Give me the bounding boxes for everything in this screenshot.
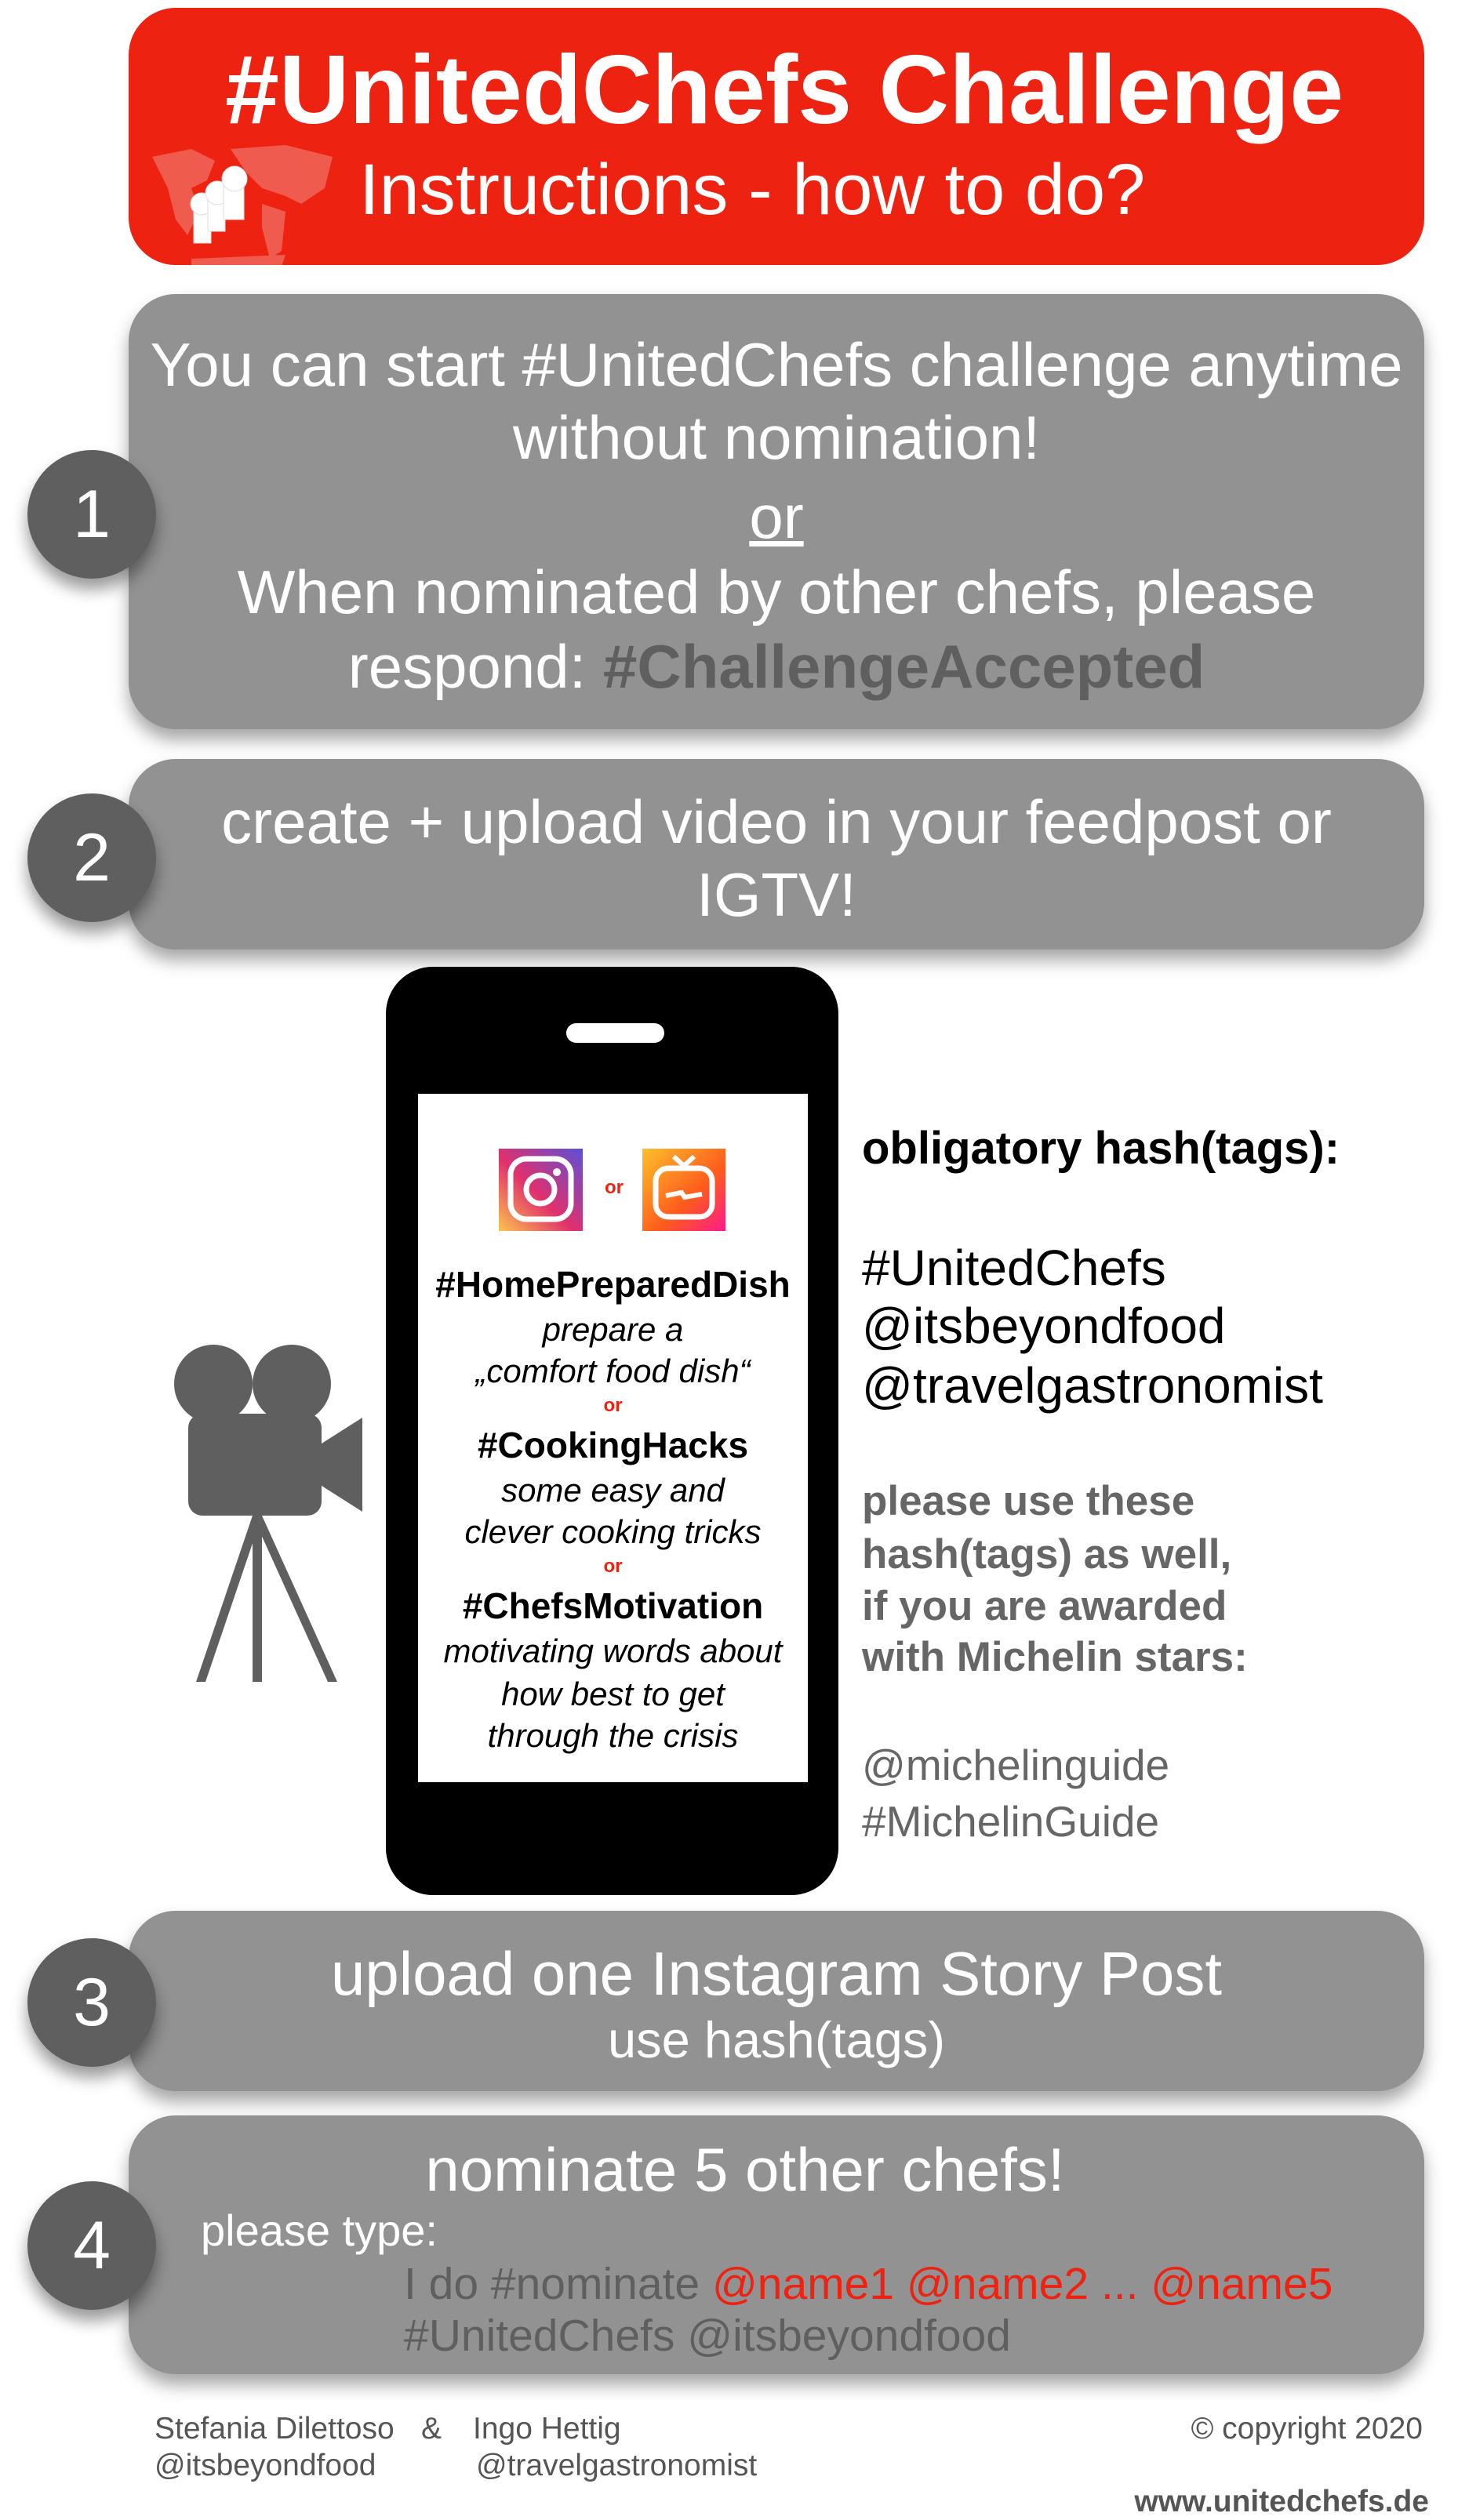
- hashtag options: how best to get: [501, 1676, 725, 1712]
- panel: step 1: You can start #UnitedChefs challenge anytime: [150, 330, 1403, 399]
- text: with Michelin stars:: [862, 1634, 1248, 1680]
- footer: copyright: © copyright 2020: [1191, 2412, 1423, 2446]
- title: #UnitedChefs Challenge: [225, 36, 1343, 144]
- panel: step 2: create + upload video in your feedpost or: [221, 787, 1332, 856]
- step number 3: 3: [73, 1965, 111, 2040]
- step number 4: [27, 2181, 156, 2310]
- icon: video camera: [174, 1345, 362, 1682]
- text: obligatory hash(tags):: [862, 1123, 1340, 1174]
- text: #UnitedChefs: [862, 1240, 1166, 1296]
- text: @travelgastronomist: [862, 1357, 1323, 1414]
- hashtag options: motivating words about: [444, 1632, 782, 1669]
- hashtag options: #CookingHacks: [478, 1425, 748, 1465]
- footer: credits: @travelgastronomist: [476, 2449, 757, 2482]
- panel: step 2: [129, 759, 1424, 950]
- footer: credits: Ingo Hettig: [473, 2412, 621, 2446]
- panel: step 4: #UnitedChefs @itsbeyondfood: [404, 2311, 1011, 2361]
- footer: credits: @itsbeyondfood: [155, 2449, 376, 2482]
- or: or: [605, 1177, 624, 1198]
- footer: credits: Stefania Dilettoso: [155, 2412, 394, 2446]
- step number 3: [27, 1938, 156, 2067]
- text: @itsbeyondfood: [862, 1298, 1225, 1354]
- hashtag options: some easy and: [501, 1472, 725, 1509]
- panel: step 1: or: [749, 482, 804, 551]
- panel: step 3: use hash(tags): [608, 2011, 945, 2068]
- panel: step 3: upload one Instagram Story Post: [331, 1939, 1222, 2008]
- step number 2: 2: [73, 820, 111, 895]
- hashtag options: clever cooking tricks: [464, 1513, 762, 1550]
- hashtag options: [435, 1264, 791, 1754]
- hashtag options: #HomePreparedDish: [435, 1264, 791, 1305]
- panel: step 4: I do #nominate @name1 @name2 ... @name5: [404, 2259, 1333, 2309]
- header banner: [129, 8, 1424, 265]
- step number 4: 4: [73, 2208, 111, 2283]
- icon: IGTV: [642, 1149, 725, 1231]
- hashtag options: prepare a: [543, 1311, 683, 1348]
- panel: step 4: nominate 5 other chefs!: [425, 2135, 1065, 2204]
- footer: credits: &: [421, 2412, 442, 2446]
- text: #MichelinGuide: [862, 1797, 1159, 1846]
- subtitle: Instructions - how to do?: [359, 150, 1145, 230]
- panel: step 1: When nominated by other chefs, please: [238, 557, 1315, 626]
- text: @michelinguide: [862, 1741, 1169, 1789]
- panel: step 4: please type:: [201, 2206, 438, 2255]
- hashtag options: or: [604, 1395, 623, 1416]
- footer: credits: [155, 2412, 757, 2482]
- icon: chef hats: [190, 166, 248, 243]
- step number 1: [27, 450, 156, 579]
- world map decoration: [152, 145, 333, 265]
- step number 1: 1: [73, 477, 111, 552]
- panel: step 2: IGTV!: [696, 860, 856, 929]
- text: hash(tags) as well,: [862, 1531, 1231, 1578]
- panel: step 1: respond: #ChallengeAccepted: [348, 632, 1205, 701]
- hashtag options: or: [604, 1556, 623, 1577]
- hashtag options: #ChefsMotivation: [463, 1585, 763, 1626]
- icon: instagram: [499, 1149, 583, 1231]
- footer: website: www.unitedchefs.de: [1134, 2485, 1429, 2518]
- text block: michelin hashtags: [861, 1478, 1248, 1846]
- panel: step 1: without nomination!: [513, 403, 1040, 472]
- text: if you are awarded: [862, 1583, 1227, 1629]
- phone screen: [418, 1094, 808, 1782]
- text block: obligatory hashtags: [862, 1123, 1340, 1414]
- step number 2: [27, 793, 156, 922]
- text: please use these: [862, 1478, 1194, 1524]
- hashtag options: through the crisis: [488, 1717, 738, 1754]
- phone mockup: [386, 967, 838, 1895]
- hashtag options: „comfort food dish“: [475, 1353, 751, 1389]
- panel: step 1: [129, 294, 1424, 729]
- panel: step 4: [129, 2115, 1424, 2374]
- speaker: [566, 1023, 664, 1043]
- panel: step 3: [129, 1911, 1424, 2091]
